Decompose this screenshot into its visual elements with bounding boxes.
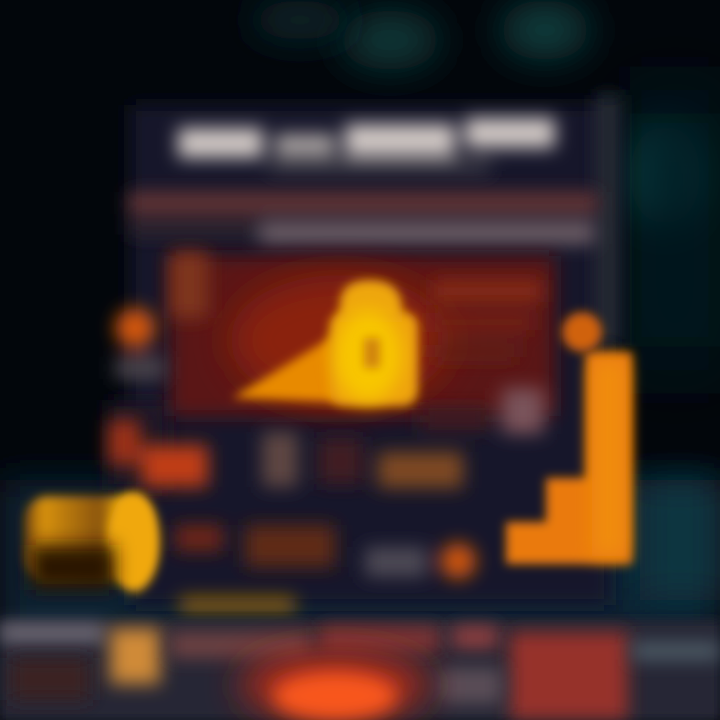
panel: central dark red area (170, 256, 555, 416)
left column icons (108, 252, 208, 487)
right text block (432, 280, 542, 359)
panel: poster (108, 95, 620, 605)
bottom orange glow (240, 650, 430, 720)
icon: yellow lock with wedge (232, 280, 418, 406)
bar chart: orange stairs (506, 312, 632, 564)
panel: bottom strip (0, 620, 720, 720)
lower row blocks (175, 525, 476, 579)
icon: gold coin stack (24, 492, 295, 613)
subtitle bands (128, 192, 598, 244)
middle row blocks (262, 388, 544, 488)
title (178, 118, 555, 172)
